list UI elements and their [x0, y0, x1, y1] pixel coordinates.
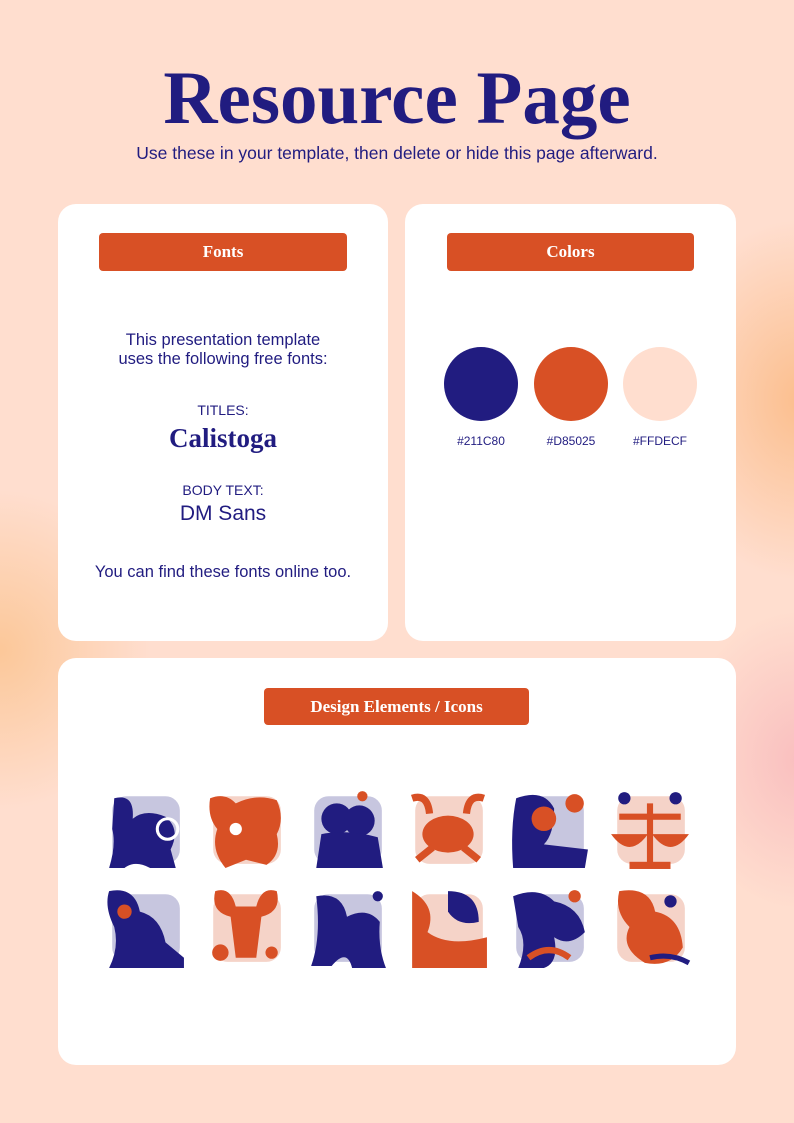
design header	[264, 688, 529, 725]
icon: libra	[611, 792, 689, 869]
footer note: You can find these fonts online too.	[95, 563, 351, 581]
panel: fonts	[58, 204, 388, 641]
icon: pisces	[617, 890, 690, 966]
label navy: #211C80	[457, 434, 505, 448]
calistoga: Calistoga	[169, 423, 277, 453]
fonts header: Fonts	[203, 242, 243, 261]
design header: Design Elements / Icons	[310, 697, 483, 716]
title: Resource Page	[163, 57, 631, 140]
subtitle: Use these in your template, then delete or hide this page afterward.	[136, 143, 658, 163]
intro text: This presentation template	[126, 331, 320, 349]
icon: scorpio	[212, 890, 281, 962]
colors header	[447, 233, 694, 271]
icon: gemini	[314, 791, 383, 868]
panel: design elements	[58, 658, 736, 1065]
icon grid	[107, 791, 690, 968]
swatch orange	[534, 347, 608, 421]
swatch navy	[444, 347, 518, 421]
titles label: TITLES:	[197, 402, 249, 418]
swatch peach	[623, 347, 697, 421]
label peach: #FFDECF	[633, 434, 687, 448]
icon: aries	[109, 796, 180, 868]
intro text	[118, 331, 328, 368]
intro text: uses the following free fonts:	[118, 350, 328, 368]
icon: leo	[512, 794, 588, 868]
icon: sagittarius	[311, 891, 386, 968]
label orange: #D85025	[547, 434, 595, 448]
icon: taurus	[209, 796, 281, 868]
panel: colors	[405, 204, 736, 641]
fonts header	[99, 233, 347, 271]
body text label: BODY TEXT:	[182, 482, 264, 498]
icon: cancer	[411, 794, 485, 864]
icon: virgo	[107, 890, 184, 968]
dm sans: DM Sans	[180, 502, 266, 525]
colors header: Colors	[546, 242, 595, 261]
icon: capricorn	[412, 891, 487, 968]
icon: aquarius	[513, 890, 585, 968]
